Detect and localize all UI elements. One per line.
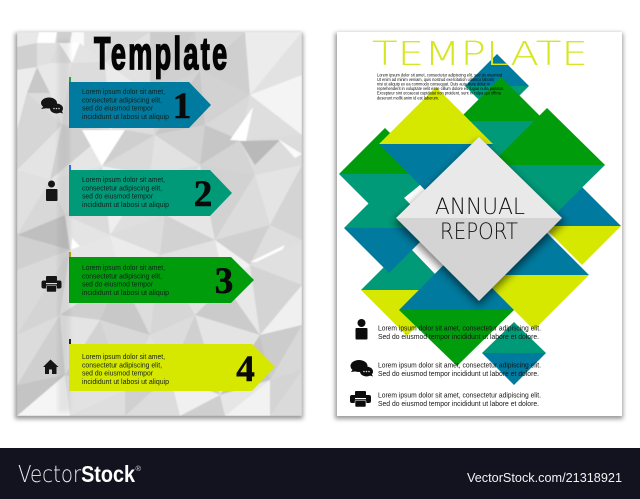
icon: chat bubbles <box>41 98 63 114</box>
icon: person <box>356 319 368 340</box>
text row 3 <box>378 390 541 408</box>
banner 1: sed do eiusmod tempor <box>82 104 153 113</box>
intro paragraph <box>377 72 504 100</box>
right poster drop shadow <box>335 33 623 419</box>
text row 2: Sed do eiusmod tempor incididunt ut labore et dolore. <box>378 369 539 378</box>
banner 2: Lorem ipsum dolor sit amet, <box>82 175 165 184</box>
banner 3: consectetur adipiscing elit, <box>82 271 162 280</box>
registered mark: ® <box>136 464 142 473</box>
diamond: yellow blue <box>379 87 493 201</box>
diamond: lower right blue yellow <box>492 233 589 330</box>
text row 2: Lorem ipsum dolor sit amet, consectetur adipiscing elit. <box>378 360 541 370</box>
banner 1: incididunt ut labosi ut aliquip <box>82 112 169 121</box>
poster title: TEMPLATE <box>372 34 588 73</box>
left poster drop shadow <box>15 33 303 419</box>
footer url: VectorStock.com/21318921 <box>467 470 622 485</box>
intro paragraph: Lorem ipsum dolor sit amet, consectetur adipiscing elit, sed do eiusmod <box>377 72 502 78</box>
diamond: lower left teal yellow <box>361 250 436 336</box>
banner 3: sed do eiusmod tempor <box>82 280 153 289</box>
banner 4: 4 <box>236 349 255 390</box>
icon: printer <box>350 391 371 407</box>
intro paragraph: deserunt mollit anim id est laborum. <box>377 96 439 100</box>
diamond: left green teal <box>339 128 420 204</box>
diamond: far right blue yellow <box>543 187 621 265</box>
diamond: left teal blue <box>344 200 420 273</box>
poster sheet <box>337 32 622 416</box>
centre diamond shadow <box>394 140 565 306</box>
banner 3: 3 <box>215 261 233 302</box>
banner 3: incididunt ut labosi ut aliquip <box>82 288 169 297</box>
diamond: small teal blue <box>482 322 546 385</box>
diamond: big right green teal <box>498 108 605 212</box>
banner 4: sed do eiusmod tempor <box>82 369 153 378</box>
banner 3 <box>69 252 254 303</box>
banner 1 <box>69 77 211 128</box>
icon: chat bubbles <box>350 360 373 376</box>
banner 4: Lorem ipsum dolor sit amet, <box>82 352 165 361</box>
icon: house <box>43 360 58 374</box>
intro paragraph: Ut enim ad minim veniam, quis nostrud exercitation ullamco laboris <box>377 77 495 82</box>
footer bar <box>0 448 640 499</box>
white strips behind centre <box>404 185 436 274</box>
banner 2: sed do eiusmod tempor <box>82 192 153 201</box>
low-poly grey background <box>17 32 302 416</box>
banner 2 <box>69 165 232 216</box>
banner 1: Lorem ipsum dolor sit amet, <box>82 87 165 96</box>
centre diamond label: REPORT <box>440 220 518 245</box>
panel: left poster <box>15 28 303 419</box>
banner 3: Lorem ipsum dolor sit amet, <box>82 263 165 272</box>
centre diamond label: ANNUAL <box>435 195 525 220</box>
panel: right poster <box>335 32 623 419</box>
centre diamond label <box>396 137 562 301</box>
diamond: upper green teal <box>464 77 540 156</box>
intro paragraph: nisi ut aliquip ex ea commodo consequat. Duis aute irure dolor in <box>377 82 490 86</box>
text row 1: Lorem ipsum dolor sit amet, consectetur adipiscing elit. <box>378 324 541 332</box>
banner 1: 1 <box>173 86 191 127</box>
text row 3: Lorem ipsum dolor sit amet, consectetur adipiscing elit. <box>378 390 541 400</box>
footer logo: VectorStock <box>18 461 135 488</box>
icon: printer <box>42 276 62 292</box>
intro paragraph: reprehenderit in voluptate velit esse cillum dolore eu fugiat nulla pariatur. <box>377 86 504 91</box>
diamond: top blue teal <box>465 54 529 100</box>
banner 4: consectetur adipiscing elit, <box>82 360 162 369</box>
text row 1 <box>378 324 541 341</box>
text row 2 <box>378 360 541 378</box>
vertical shadow band left of banners <box>58 40 70 412</box>
banner 1: consectetur adipiscing elit, <box>82 95 162 104</box>
banner 4: incididunt ut labosi ut aliquip <box>82 377 169 386</box>
banner 2: consectetur adipiscing elit, <box>82 183 162 192</box>
text row 1: Sed do eiusmod tempor incididunt ut labore et dolore. <box>378 332 539 341</box>
icon: person <box>46 180 58 201</box>
banner 2: 2 <box>194 174 212 215</box>
diamond cluster <box>339 54 621 385</box>
poster title: Template <box>94 28 227 79</box>
banner 4 <box>69 339 275 391</box>
banner 2: incididunt ut labosi ut aliquip <box>82 200 169 209</box>
diamond: lower centre blue green <box>399 265 514 366</box>
intro paragraph: Excepteur sint occaecat cupidatat non proident, sunt in culpa qui officia <box>377 90 501 96</box>
text row 3: Sed do eiusmod tempor incididunt ut labore et dolore. <box>378 399 539 408</box>
